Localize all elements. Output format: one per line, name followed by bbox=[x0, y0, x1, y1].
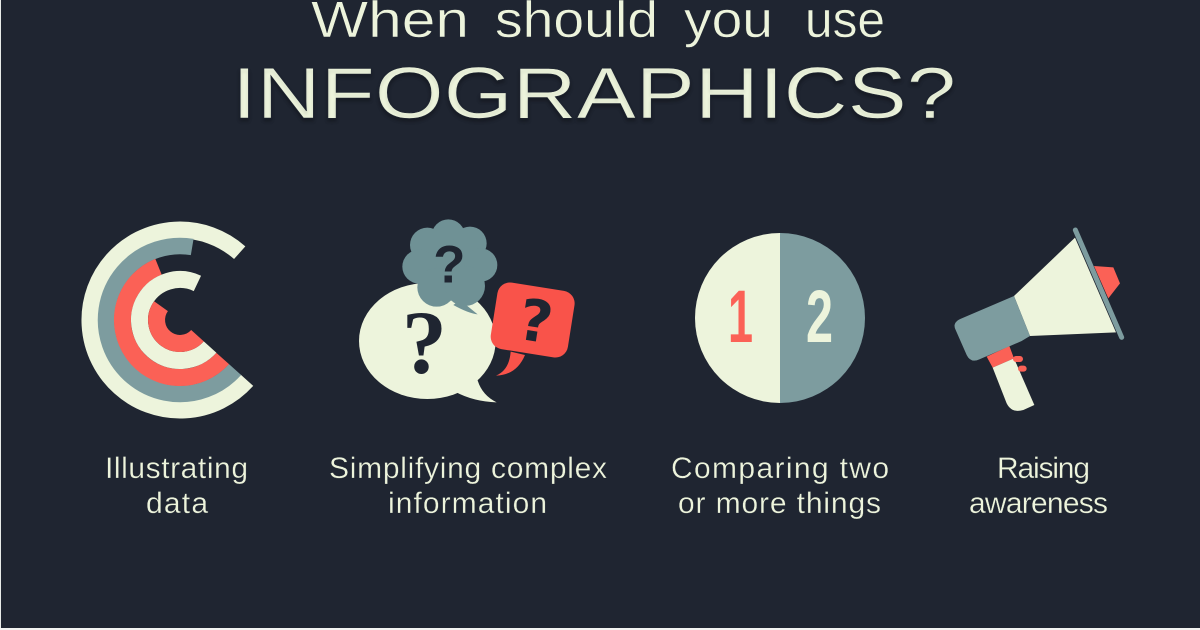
label: Illustrating data bbox=[105, 452, 248, 520]
label: Raising awareness: Raising bbox=[997, 452, 1090, 485]
label: Illustrating data: Illustrating bbox=[105, 452, 248, 485]
title line: INFOGRAPHICS?: INFOGRAPHICS? bbox=[232, 54, 956, 134]
icon: radial data chart bbox=[90, 230, 247, 410]
label: Comparing two or more things bbox=[671, 452, 889, 520]
label: Comparing two or more things: or more things bbox=[678, 487, 881, 520]
icon: comparison circle bbox=[695, 233, 865, 403]
label: Simplifying complex information bbox=[329, 452, 607, 520]
label: Illustrating data: data bbox=[146, 487, 208, 520]
red square bubble: ? bbox=[514, 286, 557, 357]
label: Raising awareness: awareness bbox=[969, 487, 1108, 520]
blue thought bubble: ? bbox=[433, 236, 465, 295]
label: Comparing two or more things: Comparing two bbox=[671, 452, 889, 485]
title line: When should you use bbox=[311, 0, 885, 48]
icon: speech bubbles with question marks bbox=[359, 219, 576, 402]
number 2: 2 bbox=[806, 275, 833, 358]
label: Simplifying complex information: information bbox=[388, 487, 547, 520]
number 1: 1 bbox=[728, 275, 753, 358]
blue thought bubble bbox=[402, 219, 497, 314]
icon: megaphone bbox=[955, 230, 1122, 411]
cream speech bubble bbox=[359, 283, 497, 402]
label: Simplifying complex information: Simplifying complex bbox=[329, 452, 607, 485]
title bbox=[232, 0, 956, 134]
label: Raising awareness bbox=[969, 452, 1108, 520]
cream speech bubble: ? bbox=[402, 294, 447, 393]
red square bubble bbox=[489, 281, 576, 376]
